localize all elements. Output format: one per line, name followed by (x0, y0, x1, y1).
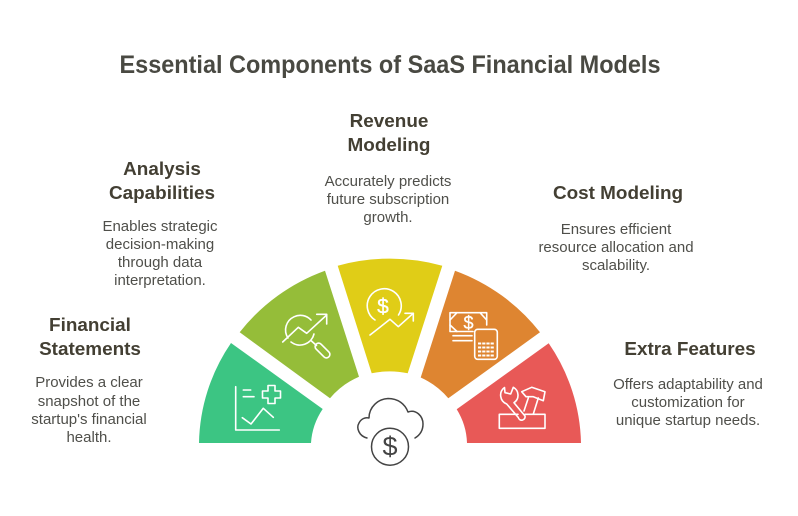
description: analysis capabilities: through data (118, 254, 203, 271)
heading: financial statements: Statements (39, 339, 141, 360)
segment: yellow (338, 259, 442, 373)
icon: magnifier with trend arrow (283, 314, 331, 359)
description: extra features: Offers adaptability and (613, 376, 763, 393)
description: financial statements: startup's financial (31, 411, 147, 428)
heading: analysis capabilities (109, 159, 215, 204)
description: analysis capabilities: Enables strategic (102, 218, 218, 235)
description: extra features: customization for (631, 394, 745, 411)
heading: extra features: Extra Features (624, 339, 756, 360)
panel: analysis capabilities text (102, 159, 218, 289)
segment: green (199, 343, 323, 443)
heading: revenue modeling: Revenue (350, 111, 428, 132)
description: revenue modeling: growth. (363, 209, 413, 226)
description: analysis capabilities: interpretation. (114, 272, 206, 289)
heading: revenue modeling (348, 111, 430, 156)
icon: toolbox with wrench and hammer (499, 387, 545, 428)
description: cost modeling: scalability. (582, 257, 650, 274)
icon: coin with growth arrow: $ (377, 296, 389, 318)
description: revenue modeling: future subscription (327, 191, 449, 208)
description: cost modeling: Ensures efficient (561, 221, 672, 238)
heading: financial statements (39, 315, 141, 360)
icon: cloud with dollar (358, 398, 423, 465)
heading: analysis capabilities: Capabilities (109, 183, 215, 204)
icon: cloud with dollar: $ (382, 432, 398, 462)
description: extra features: unique startup needs. (616, 412, 760, 429)
description: extra features (613, 376, 763, 429)
description: financial statements (31, 374, 147, 446)
description: financial statements: health. (66, 429, 112, 446)
description: analysis capabilities: decision-making (106, 236, 214, 253)
icon: chart with plus (236, 386, 280, 430)
icon: banknote and calculator (450, 313, 497, 359)
panel: revenue modeling text (325, 111, 451, 226)
heading: financial statements: Financial (49, 315, 131, 336)
heading: cost modeling: Cost Modeling (553, 183, 683, 204)
panel: financial statements text (31, 315, 147, 446)
title: Essential Components of SaaS Financial Models (120, 51, 660, 79)
description: financial statements: Provides a clear (35, 374, 143, 391)
icon: coin with growth arrow (367, 289, 413, 335)
icon: banknote and calculator: $ (463, 313, 474, 333)
panel: extra features text (613, 339, 763, 429)
segment: red (457, 343, 581, 443)
description: revenue modeling: Accurately predicts (325, 173, 451, 190)
description: cost modeling (538, 221, 694, 274)
description: financial statements: snapshot of the (38, 393, 140, 410)
description: revenue modeling (325, 173, 451, 226)
segment: orange (421, 271, 540, 398)
segment: olive (240, 271, 359, 398)
description: cost modeling: resource allocation and (538, 239, 694, 256)
heading: analysis capabilities: Analysis (123, 159, 201, 180)
heading: revenue modeling: Modeling (348, 135, 430, 156)
description: analysis capabilities (102, 218, 218, 289)
panel: cost modeling text (538, 183, 694, 274)
chart: semicircular segments (199, 259, 581, 443)
